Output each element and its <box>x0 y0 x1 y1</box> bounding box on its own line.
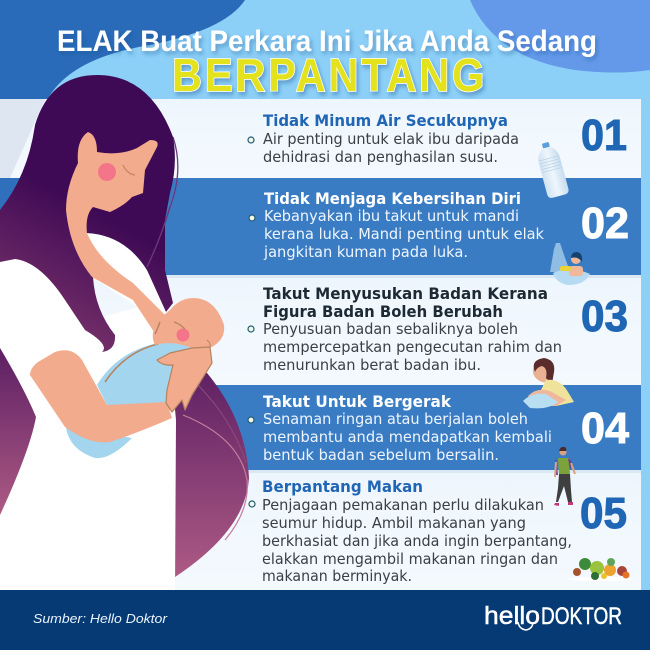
panel: row backgrounds <box>0 99 641 590</box>
lower back hair <box>165 365 249 577</box>
icon: walking woman <box>554 447 575 506</box>
baby wrap <box>66 342 192 458</box>
source: Sumber: Hello Doktor <box>33 611 168 626</box>
eye <box>123 165 135 175</box>
body text: mempercepatkan pengecutan rahim dan <box>263 338 562 356</box>
number: 04 <box>581 404 630 453</box>
bullet <box>249 215 255 221</box>
body text: Kebanyakan ibu takut untuk mandi <box>264 207 519 225</box>
hair strand inner <box>147 207 170 267</box>
body text: makanan berminyak. <box>262 567 412 585</box>
decorative blob: top right <box>470 0 650 72</box>
wrap fold <box>105 344 158 382</box>
main hair <box>0 75 175 352</box>
item 4 <box>248 392 630 506</box>
number: 05 <box>580 489 627 538</box>
number: 03 <box>581 292 628 341</box>
heading: Figura Badan Boleh Berubah <box>263 302 503 321</box>
heading: Tidak Minum Air Secukupnya <box>263 111 508 130</box>
decorative blob: top left <box>0 0 245 190</box>
heading: Tidak Menjaga Kebersihan Diri <box>264 189 521 208</box>
cheek <box>98 163 116 181</box>
body text: elakkan mengambil makanan ringan dan <box>262 550 558 568</box>
body text: dehidrasi dan penghasilan susu. <box>263 148 498 166</box>
mother face and neck <box>66 132 168 338</box>
body text: jangkitan kuman pada luka. <box>263 243 468 261</box>
icon: mother nursing <box>523 358 574 408</box>
body text <box>263 130 519 166</box>
item 1 <box>248 111 627 199</box>
title: ELAK Buat Perkara Ini Jika Anda Sedang <box>57 25 597 58</box>
baby head <box>153 298 224 348</box>
icon: vegetables and fruit <box>568 558 632 581</box>
item 2 <box>249 189 629 285</box>
body text: Senaman ringan atau berjalan boleh <box>263 410 528 428</box>
footer <box>0 590 650 650</box>
body text: Penjagaan pemakanan perlu dilakukan <box>262 496 544 514</box>
heading <box>263 284 548 321</box>
heading: Takut Menyusukan Badan Kerana <box>263 284 548 303</box>
mother arm <box>30 350 172 442</box>
icon: water bottle <box>534 140 570 199</box>
item 5 <box>249 477 632 585</box>
logo <box>484 602 622 630</box>
illustration: mother breastfeeding baby <box>0 75 249 591</box>
heading: Berpantang Makan <box>262 477 423 496</box>
hair left strip <box>0 348 36 515</box>
logo: DOKTOR <box>541 603 622 630</box>
icon: woman showering <box>550 243 590 285</box>
body text <box>263 207 544 261</box>
body text <box>263 320 562 374</box>
body text <box>263 410 552 464</box>
heading: Takut Untuk Bergerak <box>263 392 451 411</box>
body text <box>262 496 572 585</box>
body text: Penyusuan badan sebaliknya boleh <box>263 320 518 338</box>
body text: kerana luka. Mandi penting untuk elak <box>264 225 544 243</box>
body text: menurunkan berat badan ibu. <box>263 356 481 374</box>
body text: seumur hidup. Ambil makanan yang <box>262 514 526 532</box>
body text: bentuk badan sebelum bersalin. <box>263 446 499 464</box>
number: 01 <box>581 111 627 160</box>
body text: Air penting untuk elak ibu daripada <box>263 130 519 148</box>
item 3 <box>248 284 628 408</box>
hand on baby <box>157 347 212 412</box>
number: 02 <box>581 199 629 248</box>
bullet <box>248 326 254 332</box>
hair strand outer <box>147 137 178 267</box>
bullet <box>248 417 254 423</box>
bullet <box>249 501 255 507</box>
white dress <box>0 233 176 591</box>
body text: berkhasiat dan jika anda ingin berpantang, <box>262 532 572 550</box>
bullet <box>248 137 254 143</box>
logo: hello <box>484 602 540 630</box>
heading: BERPANTANG: BERPANTANG <box>172 50 484 102</box>
body text: membantu anda mendapatkan kembali <box>263 428 552 446</box>
